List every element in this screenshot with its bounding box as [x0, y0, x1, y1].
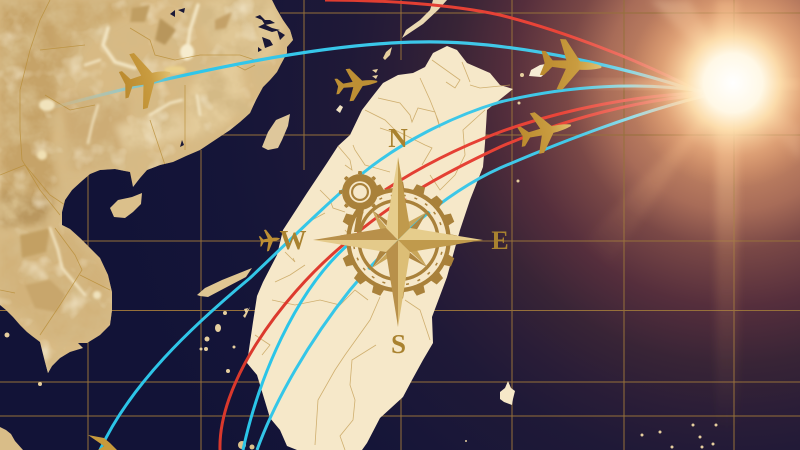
plane at upper right [539, 38, 603, 92]
island: off the south China coast [262, 114, 290, 150]
small gear [339, 171, 381, 213]
compass rose with gear ring [280, 123, 509, 359]
flare: horizontal streak [560, 80, 800, 88]
flight route: long red arc [220, 95, 702, 450]
gear ring [340, 182, 457, 298]
coastal islands dark patches [170, 8, 285, 147]
land: Borneo corner [0, 427, 23, 450]
island: Hainan [110, 193, 142, 218]
land texture: mottled terrain [0, 0, 300, 380]
compass letter N: N [388, 123, 408, 153]
plane at bottom edge [88, 435, 117, 450]
flight route: upper blue arc to mainland [55, 42, 702, 107]
small gear connector [354, 207, 364, 232]
flight route: top red arc [325, 0, 700, 92]
island: Orchid Island [500, 381, 515, 405]
flight route: red arc into compass [385, 93, 702, 190]
flight route: middle blue arc [243, 243, 350, 450]
plane near W letter [258, 228, 281, 252]
land: Taiwan island [247, 46, 513, 450]
flight route: eastern blue arc [257, 96, 704, 450]
flare: vertical streak [716, 0, 738, 435]
flare: core glow [628, 0, 800, 188]
compass letter E: E [491, 226, 509, 255]
compass letter S: S [391, 329, 406, 359]
plane over eastern sea [515, 105, 576, 157]
island: Palawan sliver [197, 268, 252, 297]
land: mainland China and Indochina [0, 0, 300, 380]
flight route: blue arc to the south-west [100, 86, 702, 450]
compass star: cardinal points [313, 157, 483, 327]
islands: small scattered [4, 47, 718, 450]
sun lens flare [560, 0, 800, 435]
compass star: diagonal points [372, 210, 427, 268]
flare: diagonal rays [585, 0, 800, 265]
rivers on Taiwan [255, 60, 510, 450]
rivers on mainland [0, 0, 255, 335]
compass letter W: W [280, 225, 306, 255]
plane north of Taiwan [333, 65, 379, 103]
island: northern sliver [402, 0, 447, 38]
plane over mainland [115, 46, 177, 113]
